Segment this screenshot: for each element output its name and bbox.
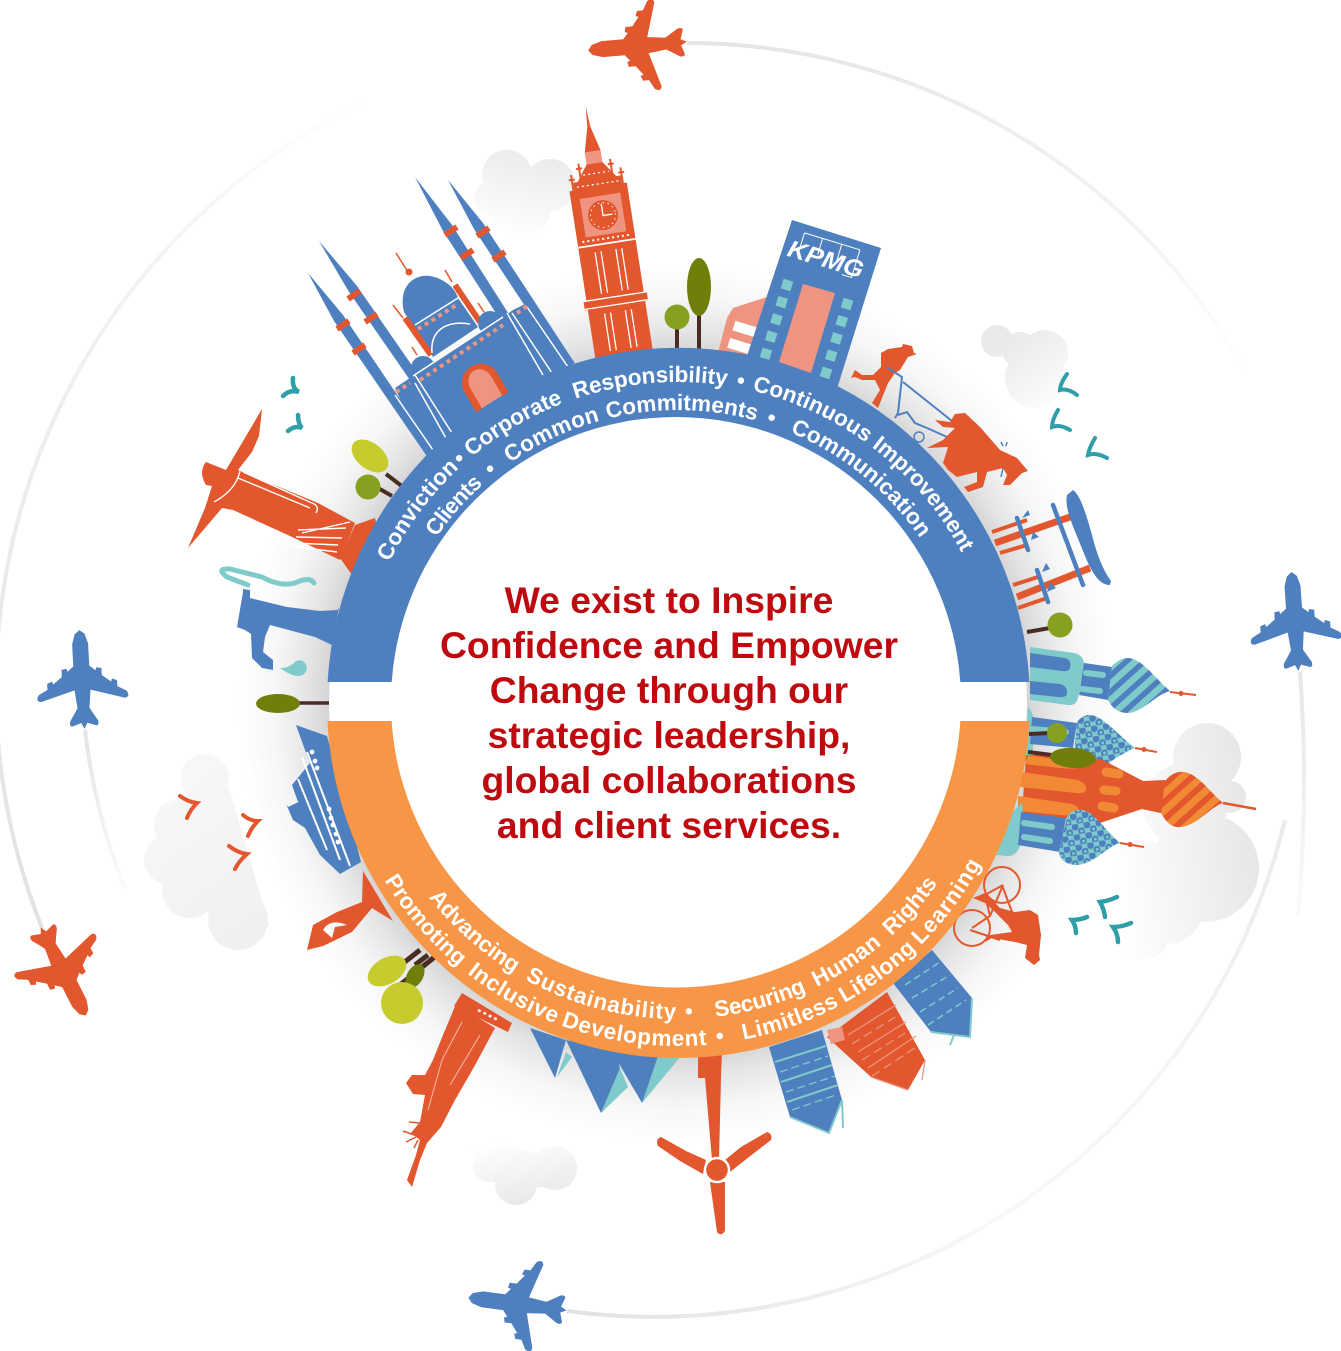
dome: large red orange [1018, 755, 1256, 827]
airplane: left blue [34, 628, 130, 731]
trees: lower left [362, 949, 437, 1024]
Japanese torii gate [992, 490, 1111, 608]
central mission statement: We exist to Inspire [505, 579, 833, 621]
birds: upper left teal [283, 378, 302, 431]
airplane: bottom blue [462, 1252, 573, 1351]
farmer with plough and horse [851, 344, 1028, 492]
tree: upper left yellow and lime [345, 433, 403, 500]
orbit path: right arc [1298, 672, 1304, 915]
ring text: orange outer line: PromotingInclusiveDevelopment • LimitlessLifelongLearning [385, 859, 983, 1049]
airplane: lower left orange [0, 907, 126, 1036]
birds: left orange [180, 796, 258, 869]
icon: water tap [222, 569, 339, 676]
globe: blue upper ring [328, 348, 1029, 682]
KPMG office building: KPMG [784, 235, 867, 284]
central mission statement [440, 579, 898, 846]
central mission statement: and client services. [497, 804, 841, 846]
landmark: Christ the Redeemer [188, 409, 378, 575]
orbit path: left arc [0, 97, 375, 928]
orbit path: top arc [687, 43, 1250, 380]
orbit path: bottom arc [567, 820, 1285, 1317]
cyclist [954, 867, 1041, 965]
landmark: blue townhouse [769, 1030, 843, 1133]
landmark: Statue of Liberty [403, 993, 512, 1187]
landmark: mosque [308, 177, 575, 457]
dome: top striped blue [1030, 647, 1196, 713]
airplane: right blue [1246, 569, 1341, 674]
landmark: red townhouse [827, 992, 925, 1090]
landmark: blue townhouse right [893, 950, 972, 1045]
globe: orange lower ring [327, 721, 1030, 1058]
tree: right upper [1027, 612, 1072, 638]
background shadow around globe [238, 263, 1118, 1143]
cloud: left [144, 754, 269, 950]
central mission statement: global collaborations [481, 759, 857, 801]
landmark: cruise ship [287, 725, 361, 874]
birds: lower right teal [1072, 897, 1131, 942]
tree: left horizontal [256, 694, 330, 713]
central mission statement: strategic leadership, [488, 714, 850, 756]
cloud: right [1092, 723, 1259, 963]
cloud: top [474, 150, 576, 237]
cloud: upper right [981, 325, 1068, 408]
central mission statement: Change through our [490, 669, 848, 711]
salmon building [716, 297, 767, 360]
trees near Big Ben [664, 258, 711, 352]
central mission statement: Confidence and Empower [440, 624, 898, 666]
ring text: blue inner line: Clients•CommonCommitments• Communication [426, 394, 928, 538]
airplane: top orange [584, 0, 691, 96]
icon: pen nib [307, 871, 393, 950]
ring text: blue outer line: Conviction•CorporateResponsibility•ContinuousImprovement [378, 366, 974, 559]
landmark: Big Ben clock tower [554, 101, 657, 365]
landmark: mountains [530, 1028, 686, 1113]
dome: middle dotted [1024, 707, 1157, 770]
ring text: orange inner line: AdvancingSustainability • SecuringHumanRights [429, 878, 936, 1024]
trees on dome group [1028, 723, 1097, 770]
KPMG office building [745, 220, 881, 392]
orbit path: inner left arc [85, 730, 125, 890]
birds: upper right teal [1052, 374, 1107, 458]
dome: lower dotted [996, 803, 1144, 865]
globe: white centre [329, 354, 1027, 1052]
landmark: wind turbine [657, 1050, 772, 1234]
cloud: bottom [465, 1136, 578, 1205]
St Basil's domes [996, 647, 1256, 865]
